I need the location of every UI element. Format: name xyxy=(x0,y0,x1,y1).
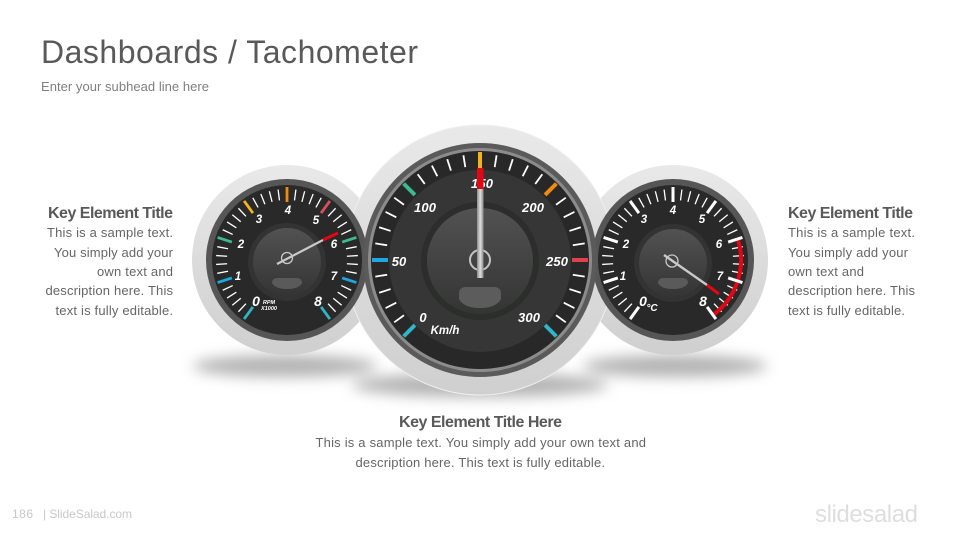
centre gauge scale labels: 50 xyxy=(392,254,407,269)
right gauge: temperature xyxy=(592,179,754,341)
centre gauge scale labels: 150 xyxy=(471,176,494,191)
left text block: own text and xyxy=(97,264,173,279)
left text block: This is a sample text. xyxy=(47,225,173,240)
right gauge major ticks xyxy=(604,187,742,319)
right gauge needle xyxy=(664,255,719,294)
left gauge scale labels: 8 xyxy=(314,293,322,309)
centre gauge scale labels xyxy=(392,176,569,337)
left gauge scale labels: RPM xyxy=(263,300,276,306)
centre gauge minor ticks xyxy=(375,155,585,322)
right gauge scale labels: °C xyxy=(646,303,658,314)
right text block: description here. This xyxy=(788,283,916,298)
centre gauge scale labels: 250 xyxy=(545,254,569,269)
right text block: You simply add your xyxy=(788,245,909,260)
left gauge hub xyxy=(248,223,326,301)
footer: page number and site: 186 xyxy=(12,507,33,521)
footer logo wordmark: slidesalad xyxy=(815,501,918,528)
left text block: Key Element Title xyxy=(48,205,173,222)
right gauge scale labels: 5 xyxy=(699,214,706,226)
right gauge scale labels: 1 xyxy=(620,271,626,283)
left gauge scale labels: 7 xyxy=(331,271,338,283)
gauge drop shadows xyxy=(193,355,767,397)
centre gauge: speedometer xyxy=(363,143,597,377)
right gauge red zone arc xyxy=(713,239,741,315)
left text block: description here. This xyxy=(46,283,174,298)
centre gauge scale labels: Km/h xyxy=(431,325,459,337)
right gauge minor ticks xyxy=(602,190,744,312)
left gauge scale labels: 1 xyxy=(235,271,241,283)
left gauge minor ticks xyxy=(216,190,358,312)
centre text block: Key Element Title Here xyxy=(399,414,562,431)
centre gauge scale labels: 0 xyxy=(419,310,427,325)
left gauge scale labels: 4 xyxy=(284,205,292,217)
left text block: text is fully editable. xyxy=(56,303,173,318)
right gauge scale labels: 2 xyxy=(622,239,630,251)
right gauge hub xyxy=(634,224,712,302)
centre gauge scale labels: 200 xyxy=(521,200,545,215)
centre text block: This is a sample text. You simply add your own text and xyxy=(316,435,646,450)
right gauge scale labels: 0 xyxy=(639,293,647,309)
left gauge: RPM xyxy=(206,179,368,341)
left gauge scale labels: 5 xyxy=(313,215,320,227)
right text block xyxy=(788,205,916,318)
centre text block: description here. This text is fully editable. xyxy=(356,455,605,470)
right gauge scale labels: 7 xyxy=(717,271,724,283)
left text block: You simply add your xyxy=(54,245,174,260)
left gauge scale labels: 6 xyxy=(331,239,338,251)
centre gauge scale labels: 300 xyxy=(518,310,541,325)
left gauge scale labels: X1000 xyxy=(260,306,277,312)
subtitle: Enter your subhead line here xyxy=(41,79,209,94)
left gauge scale labels xyxy=(235,205,338,312)
right text block: Key Element Title xyxy=(788,205,913,222)
right text block: This is a sample text. xyxy=(788,225,915,240)
left gauge scale labels: 2 xyxy=(237,239,245,251)
footer: page number and site: | SlideSalad.com xyxy=(43,507,132,521)
centre gauge hub xyxy=(421,202,539,320)
right gauge scale labels: 8 xyxy=(699,293,707,309)
centre text block xyxy=(316,414,646,470)
centre gauge scale labels: 100 xyxy=(414,200,437,215)
right gauge scale labels xyxy=(620,205,724,314)
left text block xyxy=(46,205,174,318)
gauge halo discs xyxy=(192,125,768,395)
centre gauge needle xyxy=(470,168,490,278)
left gauge coloured major ticks xyxy=(218,187,356,319)
left gauge scale labels: 3 xyxy=(256,214,263,226)
left gauge needle xyxy=(277,233,338,264)
right text block: own text and xyxy=(788,264,864,279)
left gauge scale labels: 0 xyxy=(252,293,260,309)
right gauge scale labels: 3 xyxy=(641,214,648,226)
title: Dashboards / Tachometer xyxy=(41,34,418,70)
right text block: text is fully editable. xyxy=(788,303,905,318)
right gauge scale labels: 6 xyxy=(716,239,723,251)
centre gauge coloured major ticks xyxy=(372,152,588,336)
right gauge scale labels: 4 xyxy=(669,205,677,217)
